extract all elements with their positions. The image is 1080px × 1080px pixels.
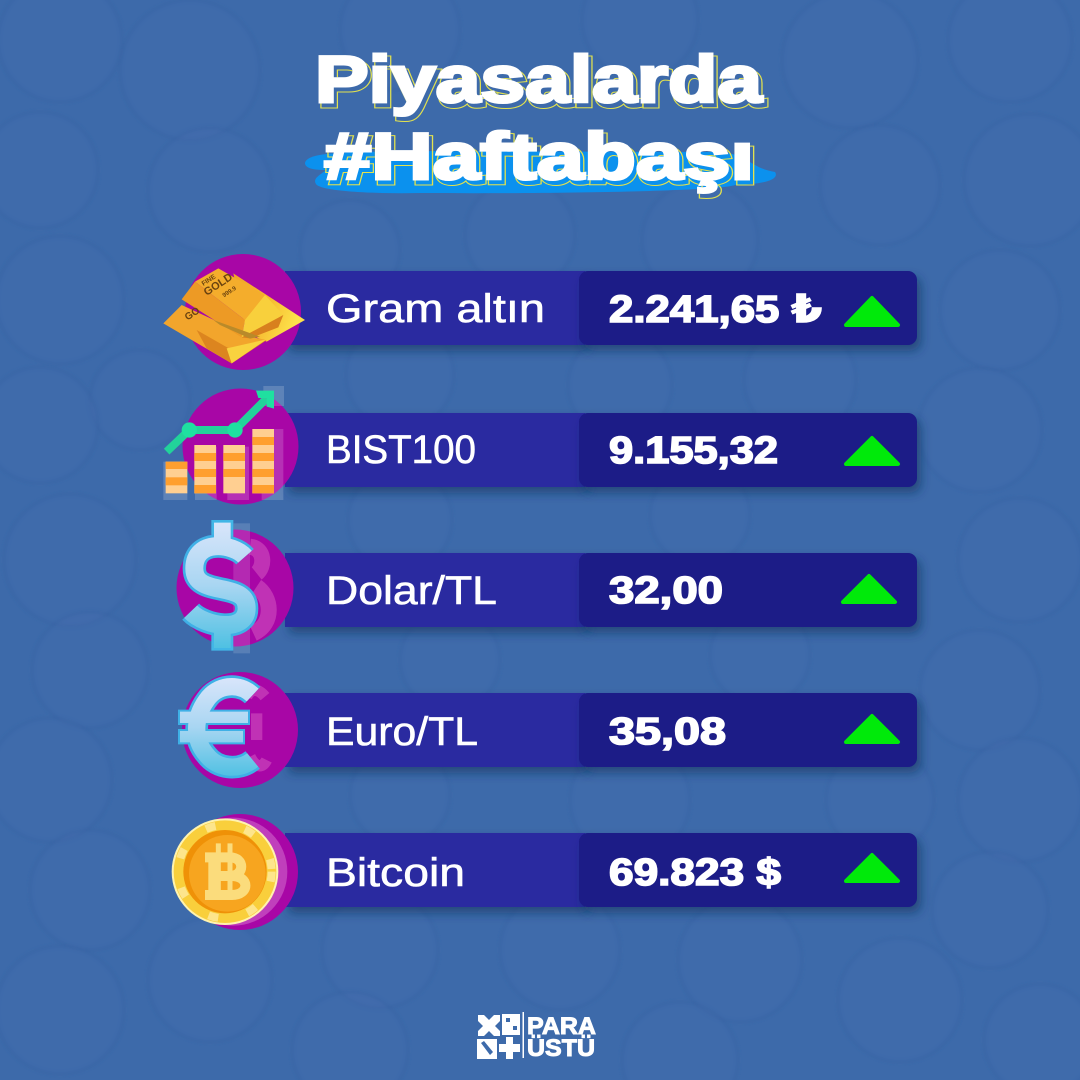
icon: euro sign	[178, 687, 267, 767]
value panel	[579, 693, 917, 767]
value: 32,00	[609, 570, 723, 612]
icon: gold bars: FINE	[201, 273, 218, 288]
label bar	[285, 833, 585, 907]
value panel	[579, 553, 917, 627]
title outline shadow: #Haftabaşı	[327, 123, 757, 197]
row: Bitcoin	[172, 814, 917, 930]
value: 2.241,65 ₺	[609, 289, 822, 331]
value: 9.155,32	[609, 430, 778, 472]
icon circle	[182, 814, 298, 930]
icon circle	[176, 530, 294, 646]
label: Euro/TL	[326, 710, 478, 754]
value: 69.823 $	[609, 852, 781, 894]
label bar	[285, 693, 585, 767]
icon circle	[182, 672, 298, 788]
label: BIST100	[326, 428, 476, 472]
value panel	[579, 833, 917, 907]
up arrow	[846, 438, 898, 464]
icon: growth chart with coin stacks	[163, 386, 284, 500]
row: Euro/TL	[178, 672, 917, 788]
icon: gold bars	[163, 268, 305, 363]
value panel	[579, 271, 917, 345]
logo text: ÜSTÜ	[527, 1035, 595, 1062]
title outline shadow: Piyasalarda	[318, 46, 767, 120]
label: Gram altın	[326, 287, 545, 331]
icon circle	[182, 388, 298, 504]
up arrow	[846, 716, 898, 742]
label: Dolar/TL	[326, 569, 497, 613]
icon: dollar sign	[191, 520, 269, 653]
value: 35,08	[609, 711, 726, 753]
label bar	[285, 271, 585, 345]
value panel	[579, 413, 917, 487]
label bar	[285, 413, 585, 487]
title outline shadow	[318, 46, 767, 197]
logo text: PARA	[527, 1013, 596, 1040]
row: BIST100	[163, 386, 917, 504]
title text	[315, 42, 764, 193]
row: gram altın	[163, 254, 917, 370]
icon: bitcoin coin	[172, 818, 287, 926]
logo icons	[477, 1012, 524, 1059]
logo text	[527, 1013, 596, 1062]
logo: Para Üstü	[477, 1012, 596, 1062]
up arrow	[846, 855, 898, 881]
label bar	[285, 553, 585, 627]
title	[305, 42, 776, 197]
row: Dolar/TL	[176, 520, 917, 653]
up arrow	[843, 576, 895, 602]
icon circle	[185, 254, 301, 370]
title text: Piyasalarda	[315, 42, 764, 116]
icon: gold bars: GO	[183, 305, 202, 323]
icon: gold bars: GOLD	[202, 271, 235, 299]
brush highlight	[305, 151, 776, 193]
icon: gold bars: 999.9	[222, 285, 238, 299]
label: Bitcoin	[326, 851, 465, 895]
up arrow	[846, 298, 898, 325]
title text: #Haftabaşı	[324, 119, 754, 193]
